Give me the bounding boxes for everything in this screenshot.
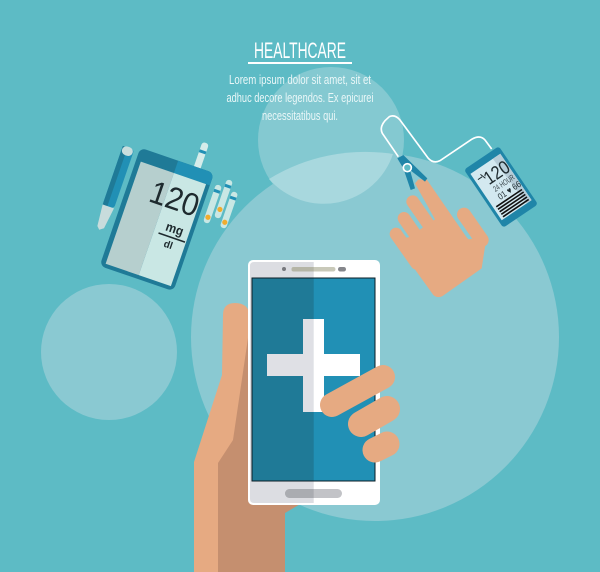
medical cross (267, 319, 360, 412)
icon: wearable monitor: 24 HOUR (491, 173, 516, 194)
smartphone (248, 260, 380, 505)
title: HEALTHCARE (254, 38, 346, 63)
icon: test strips (203, 179, 238, 229)
home button (285, 489, 342, 498)
icon: glucose meter: 120 (145, 173, 204, 224)
text block: Lorem ipsum dolor sit amet, sit et (229, 73, 371, 87)
phone screen (252, 278, 375, 481)
text block: adhuc decore legendos. Ex epicurei (226, 91, 374, 105)
text block: necessitatibus qui. (262, 109, 338, 123)
icon: wearable monitor: 120 (480, 157, 514, 190)
icon: wearable monitor: 01 ♥ 66 (496, 179, 523, 202)
title (248, 38, 352, 64)
icon: glucose meter: mg (164, 219, 186, 239)
icon: glucose meter: dl (162, 239, 174, 252)
icon: test strip in meter (192, 142, 209, 174)
background circles (41, 67, 559, 521)
icon: glucose meter (100, 148, 214, 291)
icon: pointing hand (393, 179, 487, 297)
icon: wearable monitor (464, 146, 538, 228)
text block (226, 73, 374, 123)
icon: fingers over phone (332, 377, 387, 450)
icon: hand behind phone (194, 303, 302, 572)
icon: glucose pen (95, 145, 134, 232)
speaker and camera (282, 267, 346, 272)
icon: wire (381, 116, 492, 162)
icon: finger clip (397, 155, 427, 190)
